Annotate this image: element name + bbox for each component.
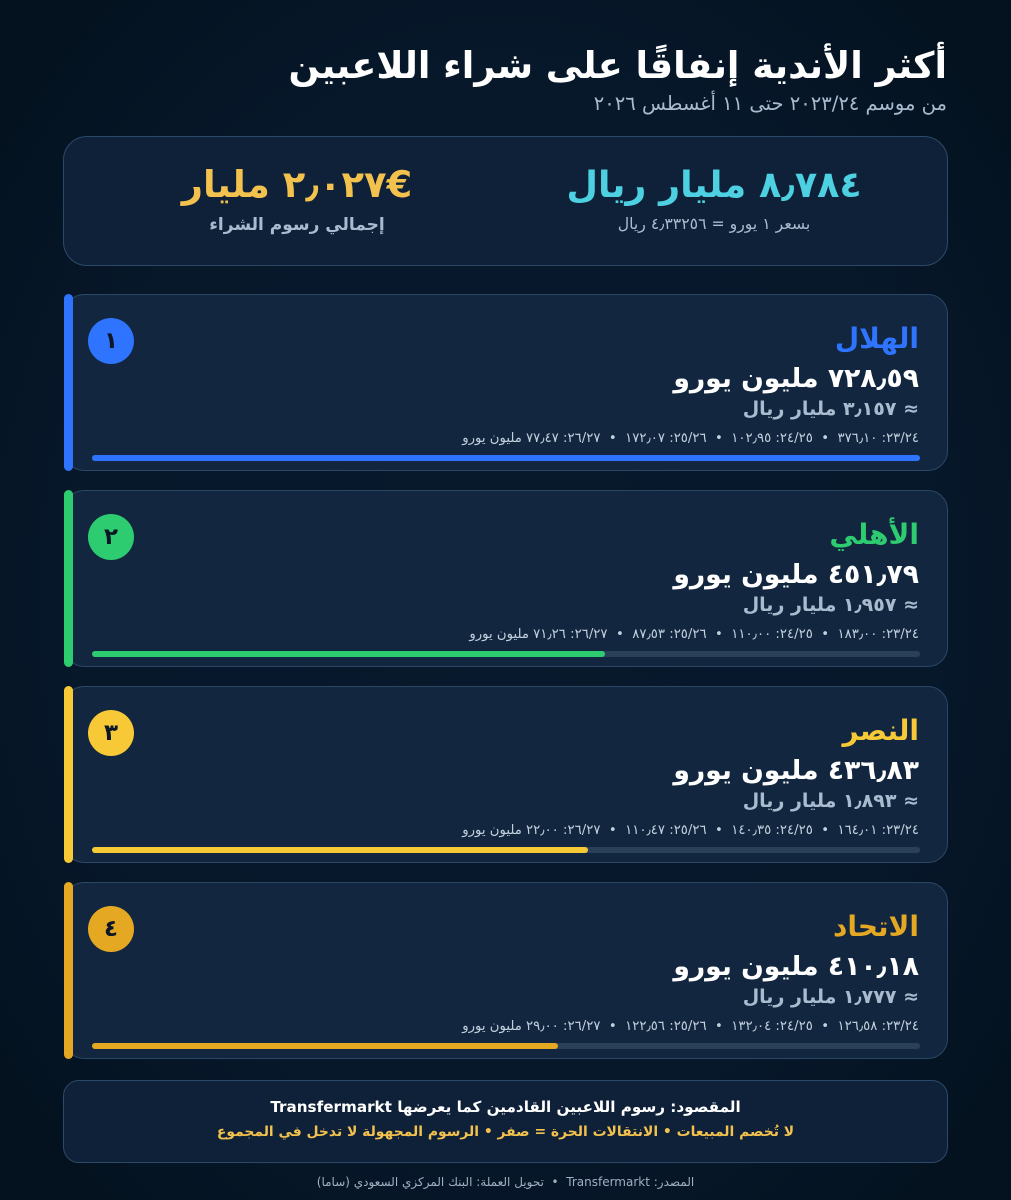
- seasonal breakdown: ٢٣/٢٤: ١٨٣٫٠٠ • ٢٤/٢٥: ١١٠٫٠٠ • ٢٥/٢٦: ٨٧٫٥٣ • ٢٦/٢٧: ٧١٫٢٦ مليون يورو: [469, 627, 919, 642]
- panel: Al Nassr: [64, 686, 948, 863]
- seasonal breakdown: ٢٣/٢٤: ١٢٦٫٥٨ • ٢٤/٢٥: ١٣٢٫٠٤ • ٢٥/٢٦: ١٢٢٫٥٦ • ٢٦/٢٧: ٢٩٫٠٠ مليون يورو: [462, 1019, 919, 1034]
- card background: [64, 294, 948, 471]
- rank badge: [88, 514, 134, 560]
- seasonal breakdown: ٢٣/٢٤: ٣٧٦٫١٠ • ٢٤/٢٥: ١٠٢٫٩٥ • ٢٥/٢٦: ١٧٢٫٠٧ • ٢٦/٢٧: ٧٧٫٤٧ مليون يورو: [462, 431, 919, 446]
- subtitle: من موسم ٢٠٢٣/٢٤ حتى ١١ أغسطس ٢٠٢٦: [594, 92, 947, 115]
- rank badge: [88, 906, 134, 952]
- progress bar: [92, 455, 920, 461]
- panel: methodology note: [63, 1080, 948, 1163]
- source footer: المصدر: Transfermarkt • تحويل العملة: البنك المركزي السعودي (ساما): [317, 1175, 694, 1189]
- progress bar: [92, 847, 920, 853]
- definition: المقصود: رسوم اللاعبين القادمين كما يعرضها Transfermarkt: [270, 1098, 741, 1116]
- panel: Al Hilal: [64, 294, 948, 471]
- amount in riyals: ≈ ١٫٧٧٧ مليار ريال: [743, 986, 919, 1008]
- accent strip: [64, 490, 72, 667]
- club name: الاتحاد: [833, 910, 919, 943]
- amount in riyals: ≈ ١٫٨٩٣ مليار ريال: [743, 790, 919, 812]
- amount in euros: ٤٥١٫٧٩ مليون يورو: [673, 559, 919, 590]
- rank badge: [88, 318, 134, 364]
- rank badge: ١: [104, 328, 118, 354]
- card background: [64, 686, 948, 863]
- panel: Al Ahli: [64, 490, 948, 667]
- title: أكثر الأندية إنفاقًا على شراء اللاعبين: [289, 44, 947, 87]
- amount in riyals: ≈ ١٫٩٥٧ مليار ريال: [743, 594, 919, 616]
- progress bar: [92, 1043, 920, 1049]
- total label: إجمالي رسوم الشراء: [209, 215, 385, 235]
- panel: Al Ittihad: [64, 882, 948, 1059]
- amount in euros: ٤٣٦٫٨٣ مليون يورو: [673, 755, 919, 786]
- club name: الأهلي: [829, 518, 919, 551]
- rank badge: [88, 710, 134, 756]
- accent strip: [64, 882, 72, 1059]
- card background: [64, 490, 948, 667]
- rank badge: ٤: [104, 916, 118, 942]
- amount in euros: ٤١٠٫١٨ مليون يورو: [673, 951, 919, 982]
- rank badge: ٢: [104, 524, 118, 550]
- amount in riyals: ≈ ٣٫١٥٧ مليار ريال: [743, 398, 919, 420]
- seasonal breakdown: ٢٣/٢٤: ١٦٤٫٠١ • ٢٤/٢٥: ١٤٠٫٣٥ • ٢٥/٢٦: ١١٠٫٤٧ • ٢٦/٢٧: ٢٢٫٠٠ مليون يورو: [462, 823, 919, 838]
- accent strip: [64, 294, 72, 471]
- panel: totals: [63, 136, 948, 266]
- exchange rate note: بسعر ١ يورو = ٤٫٣٣٢٥٦ ريال: [618, 214, 810, 233]
- total in euros: €٢٫٠٢٧ مليار: [182, 163, 412, 206]
- progress bar: [92, 651, 920, 657]
- card background: [64, 882, 948, 1059]
- total in riyals: ٨٫٧٨٤ مليار ريال: [566, 163, 862, 206]
- amount in euros: ٧٢٨٫٥٩ مليون يورو: [673, 363, 919, 394]
- club name: النصر: [842, 714, 919, 747]
- club name: الهلال: [835, 322, 919, 355]
- exclusions: لا تُخصم المبيعات • الانتقالات الحرة = صفر • الرسوم المجهولة لا تدخل في المجموع: [217, 1124, 794, 1140]
- rank badge: ٣: [104, 720, 118, 746]
- accent strip: [64, 686, 72, 863]
